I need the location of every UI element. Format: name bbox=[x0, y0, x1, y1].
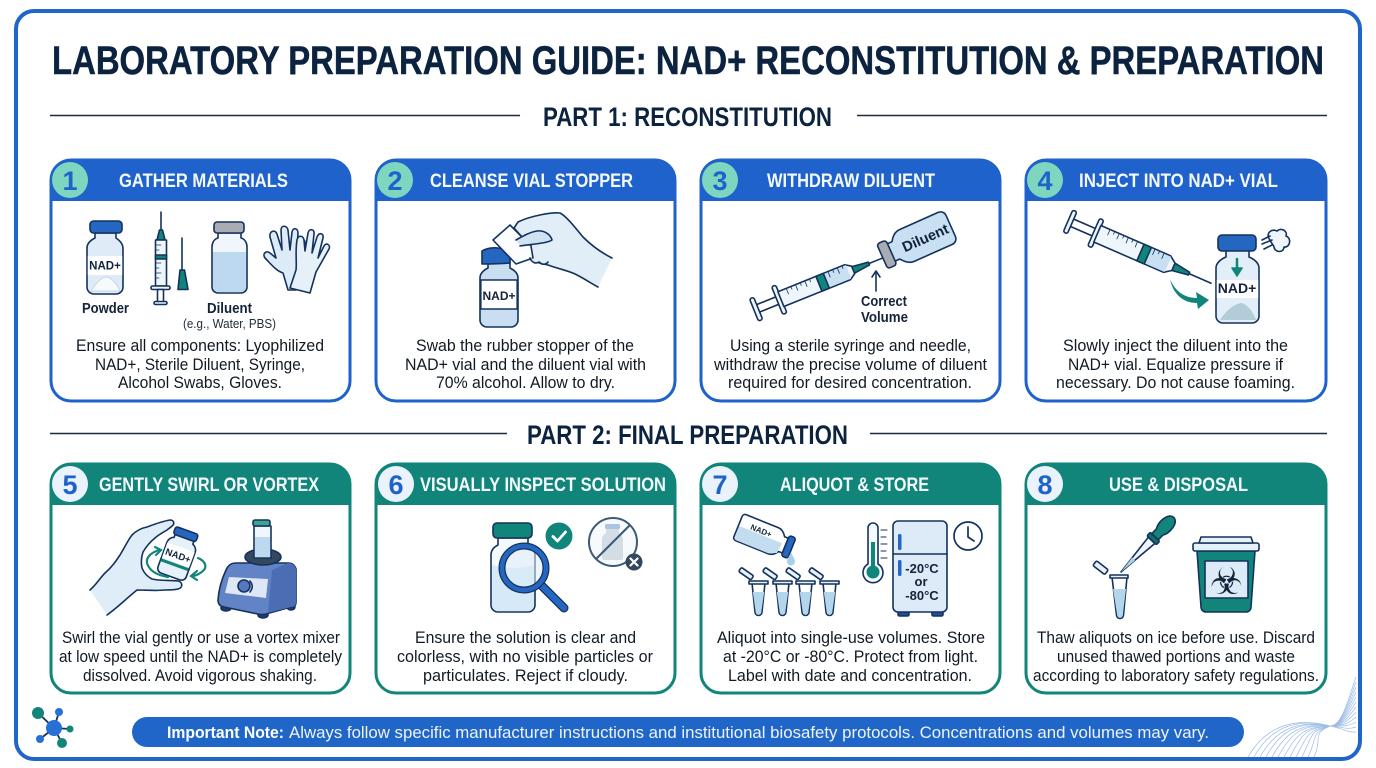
icon: check badge bbox=[546, 522, 572, 550]
icon: tilted bottle: NAD+ bbox=[749, 523, 773, 539]
text: step 1 description: Ensure all components: Lyophilized bbox=[76, 337, 324, 355]
panel: step 1 gather materials: 1 bbox=[62, 166, 78, 196]
panel: step 6 visually inspect solution bbox=[376, 463, 675, 693]
icon: magnifying glass bbox=[502, 546, 564, 608]
panel: step 3 withdraw diluent: WITHDRAW DILUENT bbox=[767, 170, 935, 192]
panel: step 1 gather materials bbox=[51, 159, 350, 401]
text: step 6 description: colorless, with no visible particles or bbox=[397, 648, 653, 666]
arrow: correct volume bbox=[872, 271, 880, 291]
text: step 3 description: withdraw the precise volume of diluent bbox=[713, 356, 987, 374]
icon: tilted bottle bbox=[733, 514, 797, 561]
panel: step 6 visually inspect solution: 6 bbox=[388, 470, 404, 500]
panel: step 5 gently swirl or vortex bbox=[51, 463, 350, 693]
label: diluent examples: (e.g., Water, PBS) bbox=[183, 317, 276, 331]
icon: syringe bbox=[748, 244, 889, 324]
text: step 4 description: necessary. Do not cause foaming. bbox=[1056, 374, 1295, 392]
text: step 5 description: dissolved. Avoid vigorous shaking. bbox=[83, 667, 317, 685]
text: step 2 description: Swab the rubber stopper of the bbox=[416, 337, 634, 355]
label: powder: Powder bbox=[82, 300, 129, 317]
icon: needle bbox=[178, 238, 188, 290]
icon: clock bbox=[954, 522, 982, 550]
heading: part 2: PART 2: FINAL PREPARATION bbox=[527, 420, 848, 450]
icon: microcentrifuge tube bbox=[1093, 561, 1128, 618]
arrow: curved teal injection direction bbox=[1170, 279, 1209, 309]
icon: NAD+ vial bbox=[480, 248, 518, 327]
icon: droplet bbox=[787, 552, 795, 566]
icon: NAD+ powder vial: NAD+ bbox=[89, 260, 121, 272]
text: step 7 description: Label with date and concentration. bbox=[728, 667, 972, 685]
icon: NAD+ vial with powder bbox=[1216, 235, 1259, 323]
panel: step 6 visually inspect solution: VISUALLY INSPECT SOLUTION bbox=[420, 474, 666, 496]
label: diluent: Diluent bbox=[207, 300, 252, 317]
text: step 5 description: at low speed until the NAD+ is completely bbox=[59, 648, 343, 666]
panel: step 7 aliquot and store: 7 bbox=[712, 470, 728, 500]
label: correct volume: Correct bbox=[861, 293, 907, 310]
icon: hand holding vial: NAD+ bbox=[164, 547, 192, 566]
text: step 7 description: Aliquot into single-use volumes. Store bbox=[717, 629, 985, 647]
icon: gloves bbox=[264, 226, 329, 293]
heading: part 1: PART 1: RECONSTITUTION bbox=[543, 102, 832, 132]
icon: freezer bbox=[893, 521, 947, 616]
icon: dropper bbox=[1116, 513, 1179, 577]
text: step 7 description: at -20°C or -80°C. Protect from light. bbox=[723, 648, 978, 666]
text: step 8 description: Thaw aliquots on ice before use. Discard bbox=[1037, 629, 1315, 647]
panel: step 3 withdraw diluent bbox=[701, 159, 1000, 401]
callout: important note: Always follow specific manufacturer instructions and institutional biosafety protocols. Concentrations and volumes may vary. bbox=[289, 723, 1209, 742]
panel: step 2 cleanse vial stopper: 2 bbox=[387, 166, 403, 196]
icon: diluent vial: Diluent bbox=[900, 221, 952, 256]
panel: step 8 use and disposal: USE & DISPOSAL bbox=[1109, 474, 1248, 496]
icon: vortex mixer bbox=[218, 520, 296, 618]
text: step 1 description: NAD+, Sterile Diluent, Syringe, bbox=[95, 356, 305, 374]
panel: step 4 inject into NAD+ vial: 4 bbox=[1037, 166, 1053, 196]
panel: step 8 use and disposal bbox=[1026, 463, 1326, 693]
icon: air puff bbox=[1262, 229, 1290, 252]
text: step 3 description: required for desired concentration. bbox=[728, 374, 972, 392]
label: correct volume: Volume bbox=[861, 309, 908, 326]
icon: NAD+ vial: NAD+ bbox=[482, 289, 516, 303]
icon: freezer: or bbox=[914, 574, 928, 589]
icon: freezer: -20°C bbox=[905, 561, 939, 576]
icon: diluent vial bbox=[875, 210, 958, 272]
panel: step 7 aliquot and store: ALIQUOT & STORE bbox=[780, 474, 929, 496]
decoration: wave lines bbox=[1248, 677, 1356, 757]
panel: step 7 aliquot and store bbox=[701, 463, 1000, 693]
text: step 4 description: Slowly inject the diluent into the bbox=[1063, 337, 1288, 355]
icon: hand with swab bbox=[493, 213, 612, 287]
icon: solution vial bbox=[491, 523, 535, 612]
text: step 8 description: unused thawed portions and waste bbox=[1057, 648, 1295, 666]
text: step 6 description: particulates. Reject if cloudy. bbox=[423, 667, 628, 685]
icon: swirl arrows bbox=[147, 547, 205, 580]
icon: syringe bbox=[151, 212, 170, 304]
text: step 6 description: Ensure the solution is clear and bbox=[415, 629, 636, 647]
panel: step 4 inject into NAD+ vial: INJECT INTO NAD+ VIAL bbox=[1079, 170, 1278, 192]
panel: step 2 cleanse vial stopper bbox=[376, 159, 675, 401]
text: step 2 description: NAD+ vial and the diluent vial with bbox=[405, 356, 646, 374]
text: step 3 description: Using a sterile syringe and needle, bbox=[730, 337, 971, 355]
panel: step 3 withdraw diluent: 3 bbox=[712, 166, 728, 196]
icon: molecule logo bbox=[32, 707, 74, 748]
text: step 5 description: Swirl the vial gently or use a vortex mixer bbox=[62, 629, 340, 647]
panel: step 4 inject into NAD+ vial bbox=[1026, 159, 1326, 401]
icon: freezer: -80°C bbox=[905, 588, 939, 603]
icon: hand holding vial bbox=[90, 520, 201, 615]
callout: important note bbox=[132, 717, 1244, 747]
icon: diluent vial bbox=[212, 222, 247, 293]
text: step 2 description: 70% alcohol. Allow to dry. bbox=[436, 374, 615, 392]
icon: NAD+ powder vial bbox=[87, 221, 123, 294]
text: step 8 description: according to laboratory safety regulations. bbox=[1033, 667, 1319, 685]
icon: rejected cloudy vial bbox=[589, 518, 642, 570]
panel: step 8 use and disposal: 8 bbox=[1037, 470, 1053, 500]
text: step 4 description: NAD+ vial. Equalize pressure if bbox=[1068, 356, 1283, 374]
icon: biohazard bin bbox=[1193, 537, 1259, 612]
callout: important note: Important Note: bbox=[167, 723, 284, 742]
panel: step 1 gather materials: GATHER MATERIALS bbox=[119, 170, 288, 192]
text: step 1 description: Alcohol Swabs, Gloves. bbox=[118, 374, 282, 392]
icon: syringe bbox=[1062, 207, 1217, 297]
icon: NAD+ vial with powder: NAD+ bbox=[1218, 280, 1256, 296]
panel: step 5 gently swirl or vortex: 5 bbox=[62, 470, 78, 500]
icon: thermometer bbox=[863, 523, 887, 583]
icon: biohazard bin: ☣ bbox=[1210, 560, 1243, 603]
panel: step 5 gently swirl or vortex: GENTLY SWIRL OR VORTEX bbox=[99, 474, 319, 496]
icon: aliquot tubes bbox=[739, 567, 839, 616]
panel: step 2 cleanse vial stopper: CLEANSE VIAL STOPPER bbox=[430, 170, 633, 192]
